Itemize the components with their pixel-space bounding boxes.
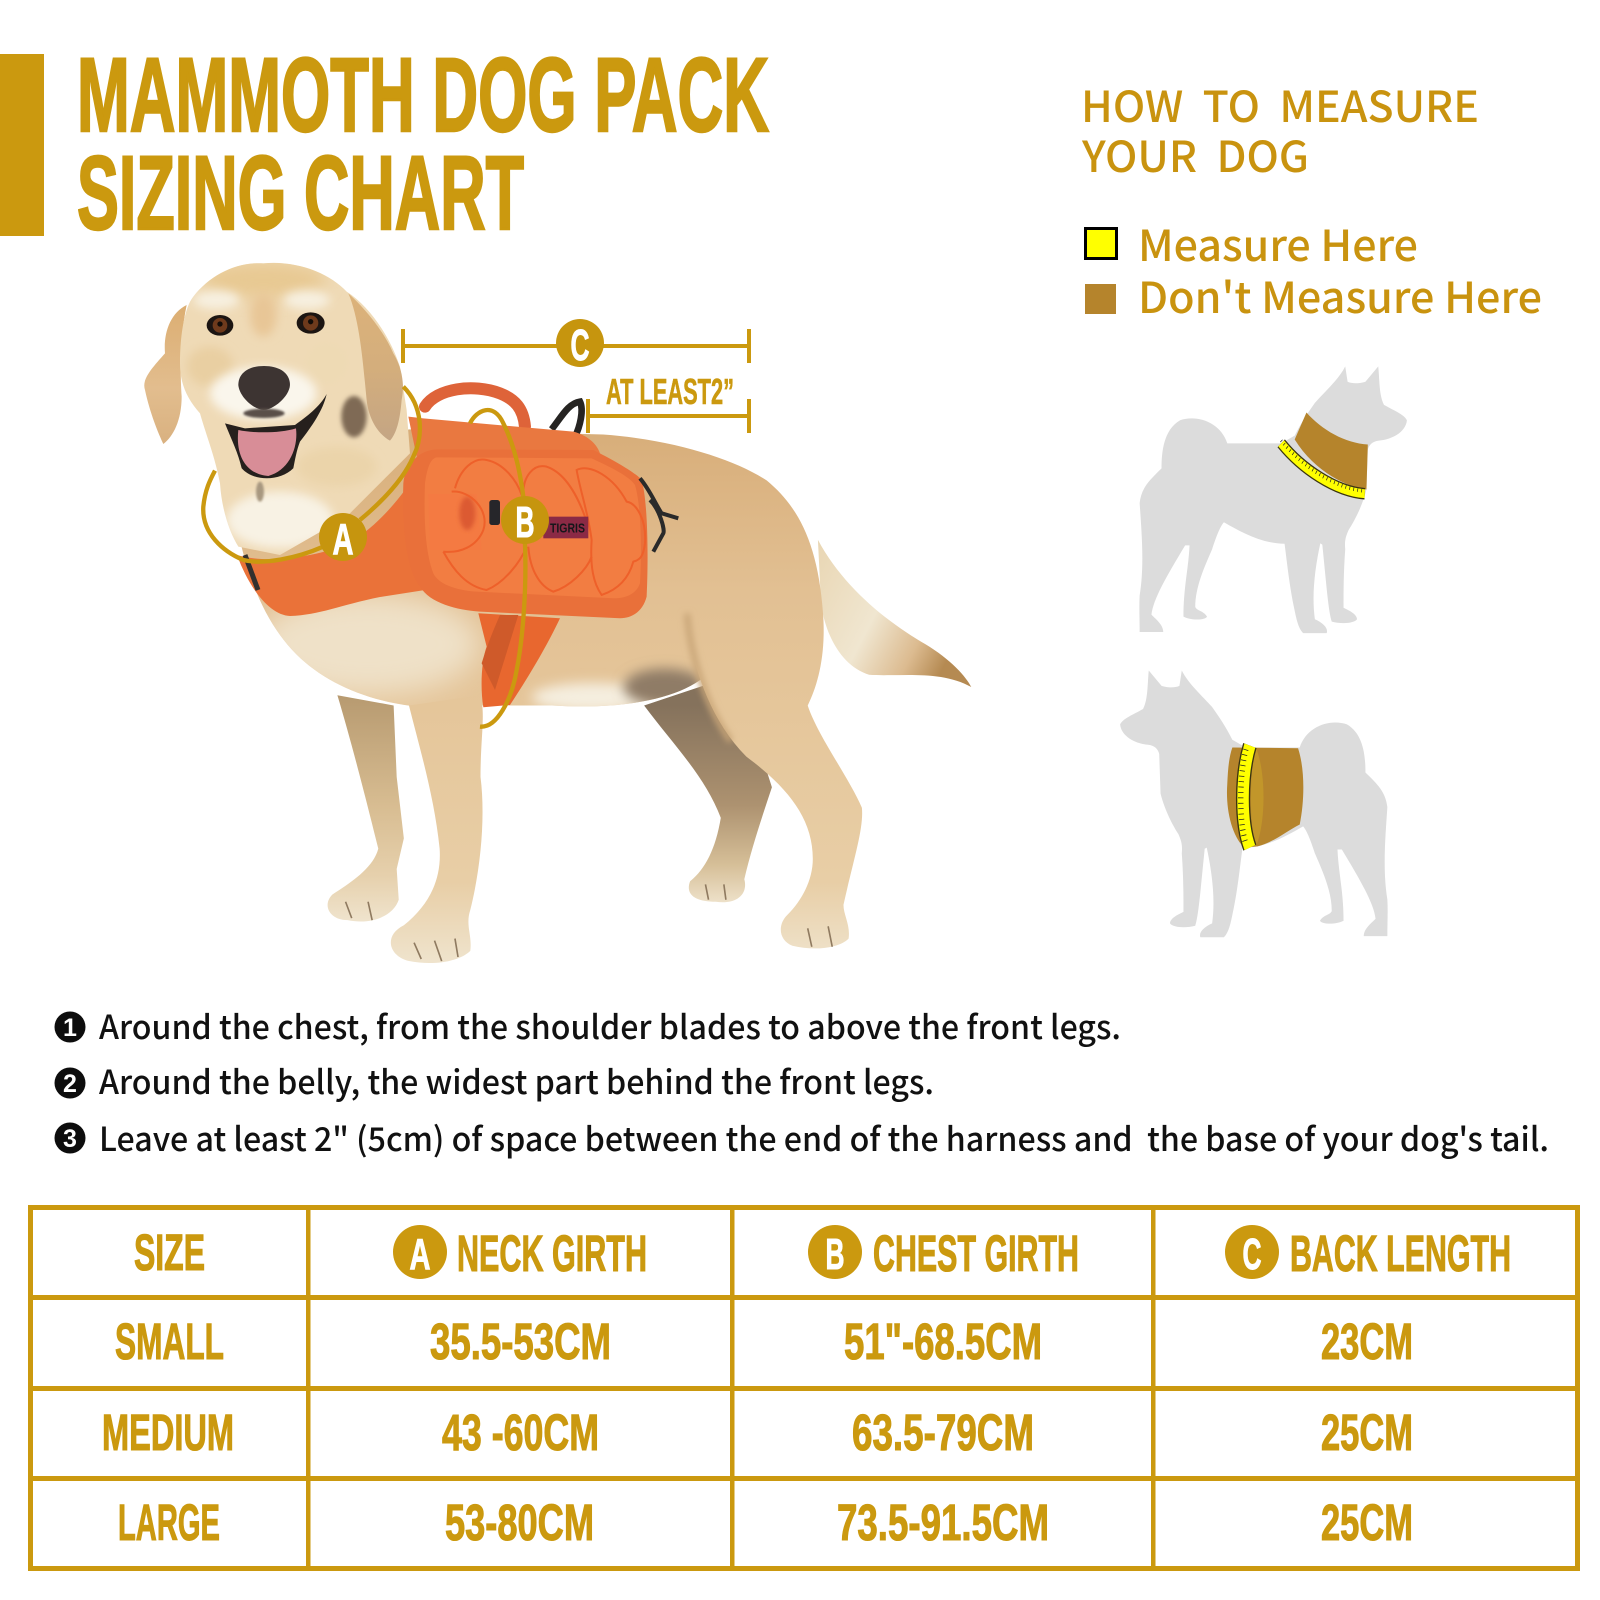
head and neck fur xyxy=(180,263,410,555)
band inner highlight xyxy=(1251,747,1264,846)
grey dog silhouette xyxy=(1120,670,1388,937)
row: medium xyxy=(102,1404,1413,1461)
face fur shading xyxy=(187,262,377,548)
row: small xyxy=(115,1313,1413,1370)
how to measure heading: YOUR DOG xyxy=(1081,123,1309,185)
instruction 1: Around the chest, from the shoulder blades to above the front legs. xyxy=(99,1001,1121,1049)
title: SIZING CHART xyxy=(77,135,524,252)
near hind leg xyxy=(685,511,862,948)
chest strap xyxy=(478,613,560,707)
instruction 3: 3 xyxy=(63,1125,77,1153)
how to measure heading xyxy=(1081,73,1479,185)
row: small: SMALL xyxy=(115,1313,224,1370)
row: small: 51"-68.5CM xyxy=(844,1313,1042,1370)
row: medium: 63.5-79CM xyxy=(852,1404,1034,1461)
measuring tape: belly xyxy=(1241,746,1250,848)
header: neck girth: NECK GIRTH xyxy=(457,1225,647,1282)
legend swatch: don't measure here xyxy=(1085,284,1116,314)
legend xyxy=(1085,212,1542,326)
neck band xyxy=(1295,413,1368,490)
chest girth curve B xyxy=(470,410,525,727)
table grid xyxy=(28,1205,1580,1571)
row: large: 25CM xyxy=(1321,1494,1413,1551)
legend label: don't measure here: Don't Measure Here xyxy=(1138,264,1542,326)
belly band xyxy=(1227,747,1303,848)
bungee cords xyxy=(443,459,645,595)
header: chest girth: CHEST GIRTH xyxy=(873,1225,1079,1282)
legend label: measure here: Measure Here xyxy=(1138,212,1418,274)
flap shade xyxy=(459,497,475,530)
measuring tape: neck xyxy=(1281,441,1365,494)
header row xyxy=(134,1224,1511,1282)
header: chest girth: B xyxy=(826,1230,844,1279)
measuring instructions xyxy=(54,1001,1549,1161)
title accent bar xyxy=(0,54,44,236)
pack panel xyxy=(425,457,641,598)
badge A: A xyxy=(332,515,354,564)
row: large: LARGE xyxy=(118,1494,220,1551)
neck girth curve A xyxy=(203,387,420,562)
row: large: 53-80CM xyxy=(445,1494,594,1551)
nose xyxy=(238,366,290,410)
header: neck girth xyxy=(393,1225,647,1282)
top handle xyxy=(425,388,525,427)
badge A xyxy=(319,513,367,564)
at least 2 inch label: AT LEAST2” xyxy=(606,371,734,412)
backpack xyxy=(403,388,678,707)
row: medium: 43 -60CM xyxy=(442,1404,599,1461)
title xyxy=(77,37,769,252)
near foreleg xyxy=(391,695,483,963)
instruction 2: Around the belly, the widest part behind the front legs. xyxy=(99,1056,934,1104)
TIGRIS label xyxy=(543,517,588,538)
row: large: 73.5-91.5CM xyxy=(837,1494,1049,1551)
grey dog silhouette xyxy=(1139,366,1407,633)
badge B: B xyxy=(516,498,534,547)
main pack body xyxy=(403,449,648,618)
badge C xyxy=(556,319,604,370)
row: medium: MEDIUM xyxy=(102,1404,234,1461)
header: back length xyxy=(1225,1225,1511,1282)
cord lock xyxy=(489,500,500,525)
badge B xyxy=(501,496,549,547)
D ring xyxy=(552,402,582,437)
black cord xyxy=(640,478,678,552)
thigh crease shadow xyxy=(687,613,731,741)
back length line C xyxy=(403,329,749,363)
TIGRIS label: TIGRIS xyxy=(550,522,585,536)
chest light fur xyxy=(256,593,705,712)
header: neck girth: A xyxy=(410,1230,430,1279)
row: medium: 25CM xyxy=(1321,1404,1413,1461)
mouth xyxy=(225,394,327,478)
dog body layers xyxy=(225,429,971,963)
left ear xyxy=(144,305,187,444)
harness neck strap xyxy=(237,490,425,616)
instruction 1: 1 xyxy=(63,1014,77,1042)
header: size: SIZE xyxy=(134,1224,205,1281)
far hind leg xyxy=(644,675,772,902)
main dog photo illustration xyxy=(144,262,971,963)
top molle strip xyxy=(408,417,600,457)
harness buckle xyxy=(245,555,258,590)
sizing table xyxy=(28,1205,1580,1571)
tail xyxy=(818,540,971,687)
row: small: 23CM xyxy=(1321,1313,1413,1370)
right ear xyxy=(348,293,403,441)
header: chest girth xyxy=(808,1225,1079,1282)
header: back length: C xyxy=(1242,1230,1262,1279)
row: small: 35.5-53CM xyxy=(430,1313,611,1370)
toe lines xyxy=(346,884,832,961)
neck measuring dog diagram xyxy=(1139,366,1407,633)
left eye xyxy=(207,315,233,336)
muzzle shadow xyxy=(243,409,285,418)
how to measure heading: HOW TO MEASURE xyxy=(1081,73,1479,135)
row: large xyxy=(118,1494,1413,1551)
dog head xyxy=(144,262,410,555)
chest measuring dog diagram xyxy=(1120,670,1388,937)
tongue xyxy=(238,428,296,476)
chest strap inner band xyxy=(482,615,518,690)
body xyxy=(225,429,824,708)
instruction 3: Leave at least 2" (5cm) of space between the end of the harness and the base of your dog's tail. xyxy=(99,1113,1549,1161)
badge C: C xyxy=(570,321,590,370)
title: MAMMOTH DOG PACK xyxy=(77,37,769,154)
far foreleg xyxy=(328,695,404,921)
side strap flap xyxy=(428,494,482,550)
at least 2 inch line xyxy=(588,399,749,433)
instruction 2: 2 xyxy=(63,1070,77,1098)
legend swatch: measure here xyxy=(1086,228,1116,258)
right eye xyxy=(297,312,325,334)
